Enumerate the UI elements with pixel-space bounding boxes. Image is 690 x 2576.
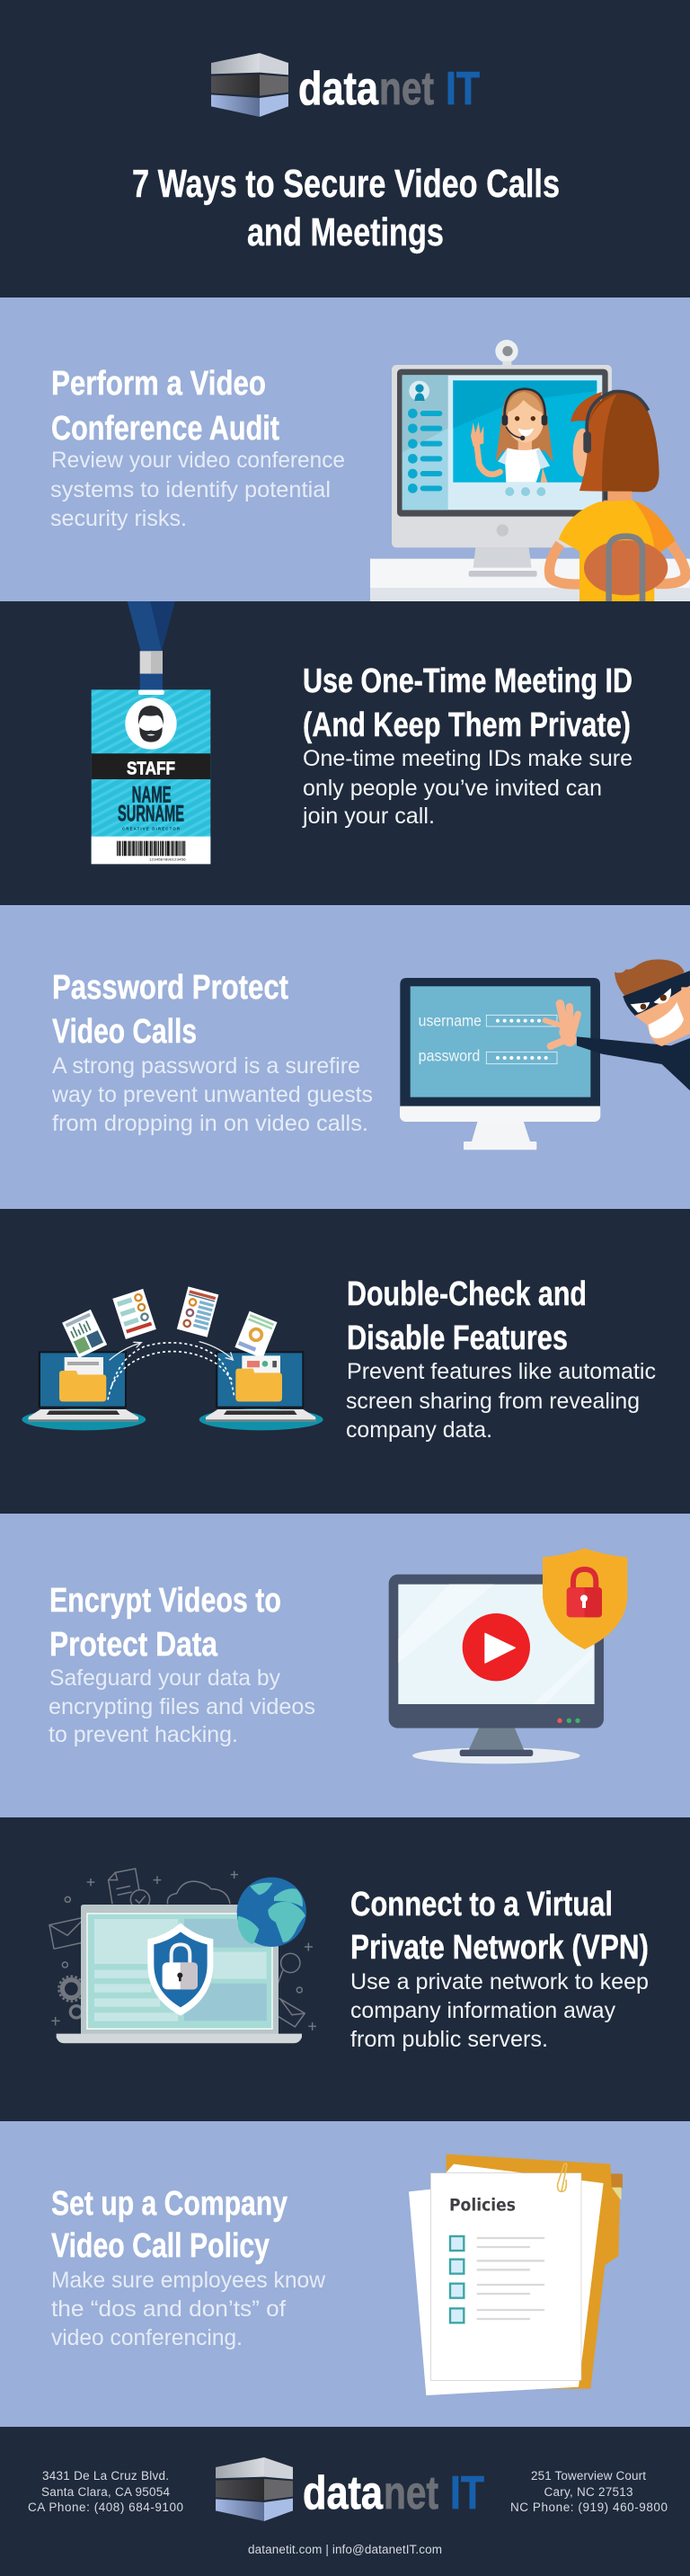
- body text: systems to identify potential: [50, 477, 331, 502]
- body text: company data.: [346, 1417, 492, 1443]
- logo cube: [211, 53, 288, 117]
- badge text: STAFF: [127, 759, 175, 779]
- body text: the “dos and don’ts” of: [51, 2296, 286, 2322]
- outline icons: [49, 1869, 316, 2030]
- left laptop: [22, 1351, 146, 1430]
- body text: [50, 448, 345, 531]
- california address: CA Phone: (408) 684-9100: [28, 2500, 183, 2514]
- heading: Encrypt Videos to: [49, 1582, 281, 1620]
- panel: perform a video conference audit: [0, 298, 690, 601]
- policies text: Policies: [449, 2197, 516, 2216]
- body text: to prevent hacking.: [49, 1722, 238, 1747]
- illustration: video call on monitor: [370, 340, 690, 601]
- document: rings and bars: [112, 1289, 156, 1339]
- hand: [545, 1004, 578, 1046]
- heading: Double-Check and: [347, 1275, 587, 1313]
- heading: Perform a Video: [51, 365, 266, 403]
- north carolina address: [510, 2469, 668, 2514]
- body text: from public servers.: [350, 2027, 548, 2052]
- logo wordmark: data: [303, 2467, 384, 2519]
- heading: Protect Data: [49, 1626, 218, 1664]
- heading: [303, 662, 632, 744]
- title: 7 Ways to Secure Video Calls: [132, 162, 560, 206]
- logo wordmark: net: [384, 2467, 438, 2519]
- heading: [347, 1275, 587, 1357]
- illustration: policies folder: [409, 2154, 623, 2395]
- logo wordmark: [298, 63, 480, 115]
- body text: encrypting files and videos: [49, 1694, 315, 1719]
- heading: Password Protect: [52, 969, 288, 1007]
- badge text: NAME: [132, 782, 172, 807]
- panel: one-time meeting id: [0, 601, 690, 905]
- heading: Disable Features: [347, 1319, 568, 1357]
- body text: security risks.: [50, 506, 187, 531]
- shield with padlock: [543, 1549, 627, 1649]
- body text: way to prevent unwanted guests: [51, 1082, 373, 1107]
- badge text: 1234567890123456: [149, 857, 187, 862]
- right folder: [235, 1355, 282, 1401]
- body text: [350, 1969, 649, 2052]
- panel: encrypt videos: [0, 1514, 690, 1817]
- body text: [346, 1359, 656, 1443]
- body text: A strong password is a surefire: [52, 1053, 360, 1079]
- logo cube: [216, 2457, 293, 2521]
- footer logo: [216, 2457, 484, 2521]
- body text: Make sure employees know: [51, 2268, 326, 2293]
- left folder: [59, 1357, 106, 1401]
- illustration: secured laptop with globe: [49, 1869, 316, 2043]
- gears: [58, 1976, 84, 2018]
- viewer from behind: [549, 391, 686, 601]
- heading: [52, 969, 288, 1051]
- illustration: monitor with play button and shield: [389, 1549, 627, 1763]
- logo: datanet IT: [211, 53, 480, 117]
- heading: [51, 365, 279, 448]
- document: chart: [62, 1310, 107, 1358]
- title: and Meetings: [247, 210, 444, 254]
- logo wordmark: [303, 2467, 484, 2519]
- laptop: [57, 1905, 302, 2043]
- panel: double-check and disable features: [0, 1209, 690, 1514]
- login form: username: [419, 1012, 482, 1030]
- body text: from dropping in on video calls.: [52, 1111, 368, 1136]
- logo wordmark: IT: [446, 63, 480, 115]
- badge text: SURNAME: [118, 801, 184, 826]
- website and email: datanetit.com | info@datanetIT.com: [248, 2543, 442, 2556]
- panel: company video call policy: [0, 2121, 690, 2427]
- body text: join your call.: [302, 804, 435, 829]
- on-screen caller: [469, 388, 553, 483]
- panel: footer: [0, 2427, 690, 2576]
- body text: [302, 746, 632, 829]
- document: list: [177, 1286, 218, 1337]
- california address: Santa Clara, CA 95054: [41, 2485, 170, 2499]
- checklist: [450, 2236, 544, 2323]
- logo wordmark: net: [379, 63, 434, 115]
- heading: Connect to a Virtual: [350, 1886, 613, 1923]
- body text: Use a private network to keep: [350, 1969, 649, 1994]
- body text: [49, 1666, 315, 1747]
- body text: [51, 2268, 326, 2350]
- play button: [463, 1613, 530, 1681]
- heading: Video Call Policy: [51, 2227, 270, 2265]
- north carolina address: 251 Towerview Court: [531, 2469, 646, 2483]
- panel: connect to a vpn: [0, 1817, 690, 2121]
- illustration: file transfer between laptops: [22, 1286, 323, 1430]
- body text: Prevent features like automatic: [347, 1359, 656, 1384]
- heading: Set up a Company: [51, 2185, 288, 2223]
- arrows: [110, 1342, 233, 1360]
- body text: company information away: [350, 1998, 615, 2023]
- logo wordmark: IT: [450, 2467, 484, 2519]
- logo wordmark: data: [298, 63, 379, 115]
- california address: 3431 De La Cruz Blvd.: [42, 2469, 169, 2483]
- heading: [49, 1582, 281, 1664]
- paperclip: [558, 2163, 567, 2191]
- body text: One-time meeting IDs make sure: [303, 746, 632, 771]
- illustration: thief at login screen: [400, 959, 690, 1150]
- thief: [545, 959, 690, 1090]
- badge text: CREATIVE DIRECTOR: [122, 827, 181, 831]
- heading: [51, 2185, 288, 2265]
- panel: header: [0, 0, 690, 298]
- shield with padlock: [147, 1923, 213, 2016]
- body text: Review your video conference: [51, 448, 345, 473]
- body text: video conferencing.: [51, 2325, 243, 2350]
- heading: Video Calls: [52, 1013, 197, 1051]
- illustration: staff id badge: [92, 601, 210, 864]
- globe: [237, 1878, 306, 1947]
- north carolina address: NC Phone: (919) 460-9800: [510, 2500, 668, 2514]
- title: [132, 162, 560, 254]
- body text: only people you’ve invited can: [303, 776, 602, 801]
- heading: Conference Audit: [51, 410, 279, 448]
- body text: Safeguard your data by: [49, 1666, 280, 1691]
- body text: screen sharing from revealing: [346, 1389, 640, 1414]
- panel: password protect video calls: [0, 905, 690, 1209]
- california address: [28, 2469, 183, 2514]
- document: donut: [234, 1311, 278, 1358]
- login form: password: [419, 1047, 480, 1065]
- body text: [51, 1053, 373, 1136]
- face: [138, 706, 164, 742]
- heading: [350, 1886, 649, 1967]
- dashed transfer arcs: [108, 1343, 234, 1399]
- north carolina address: Cary, NC 27513: [544, 2485, 632, 2499]
- badge text: [118, 759, 187, 862]
- right laptop: [199, 1351, 323, 1430]
- login form: [419, 1012, 557, 1065]
